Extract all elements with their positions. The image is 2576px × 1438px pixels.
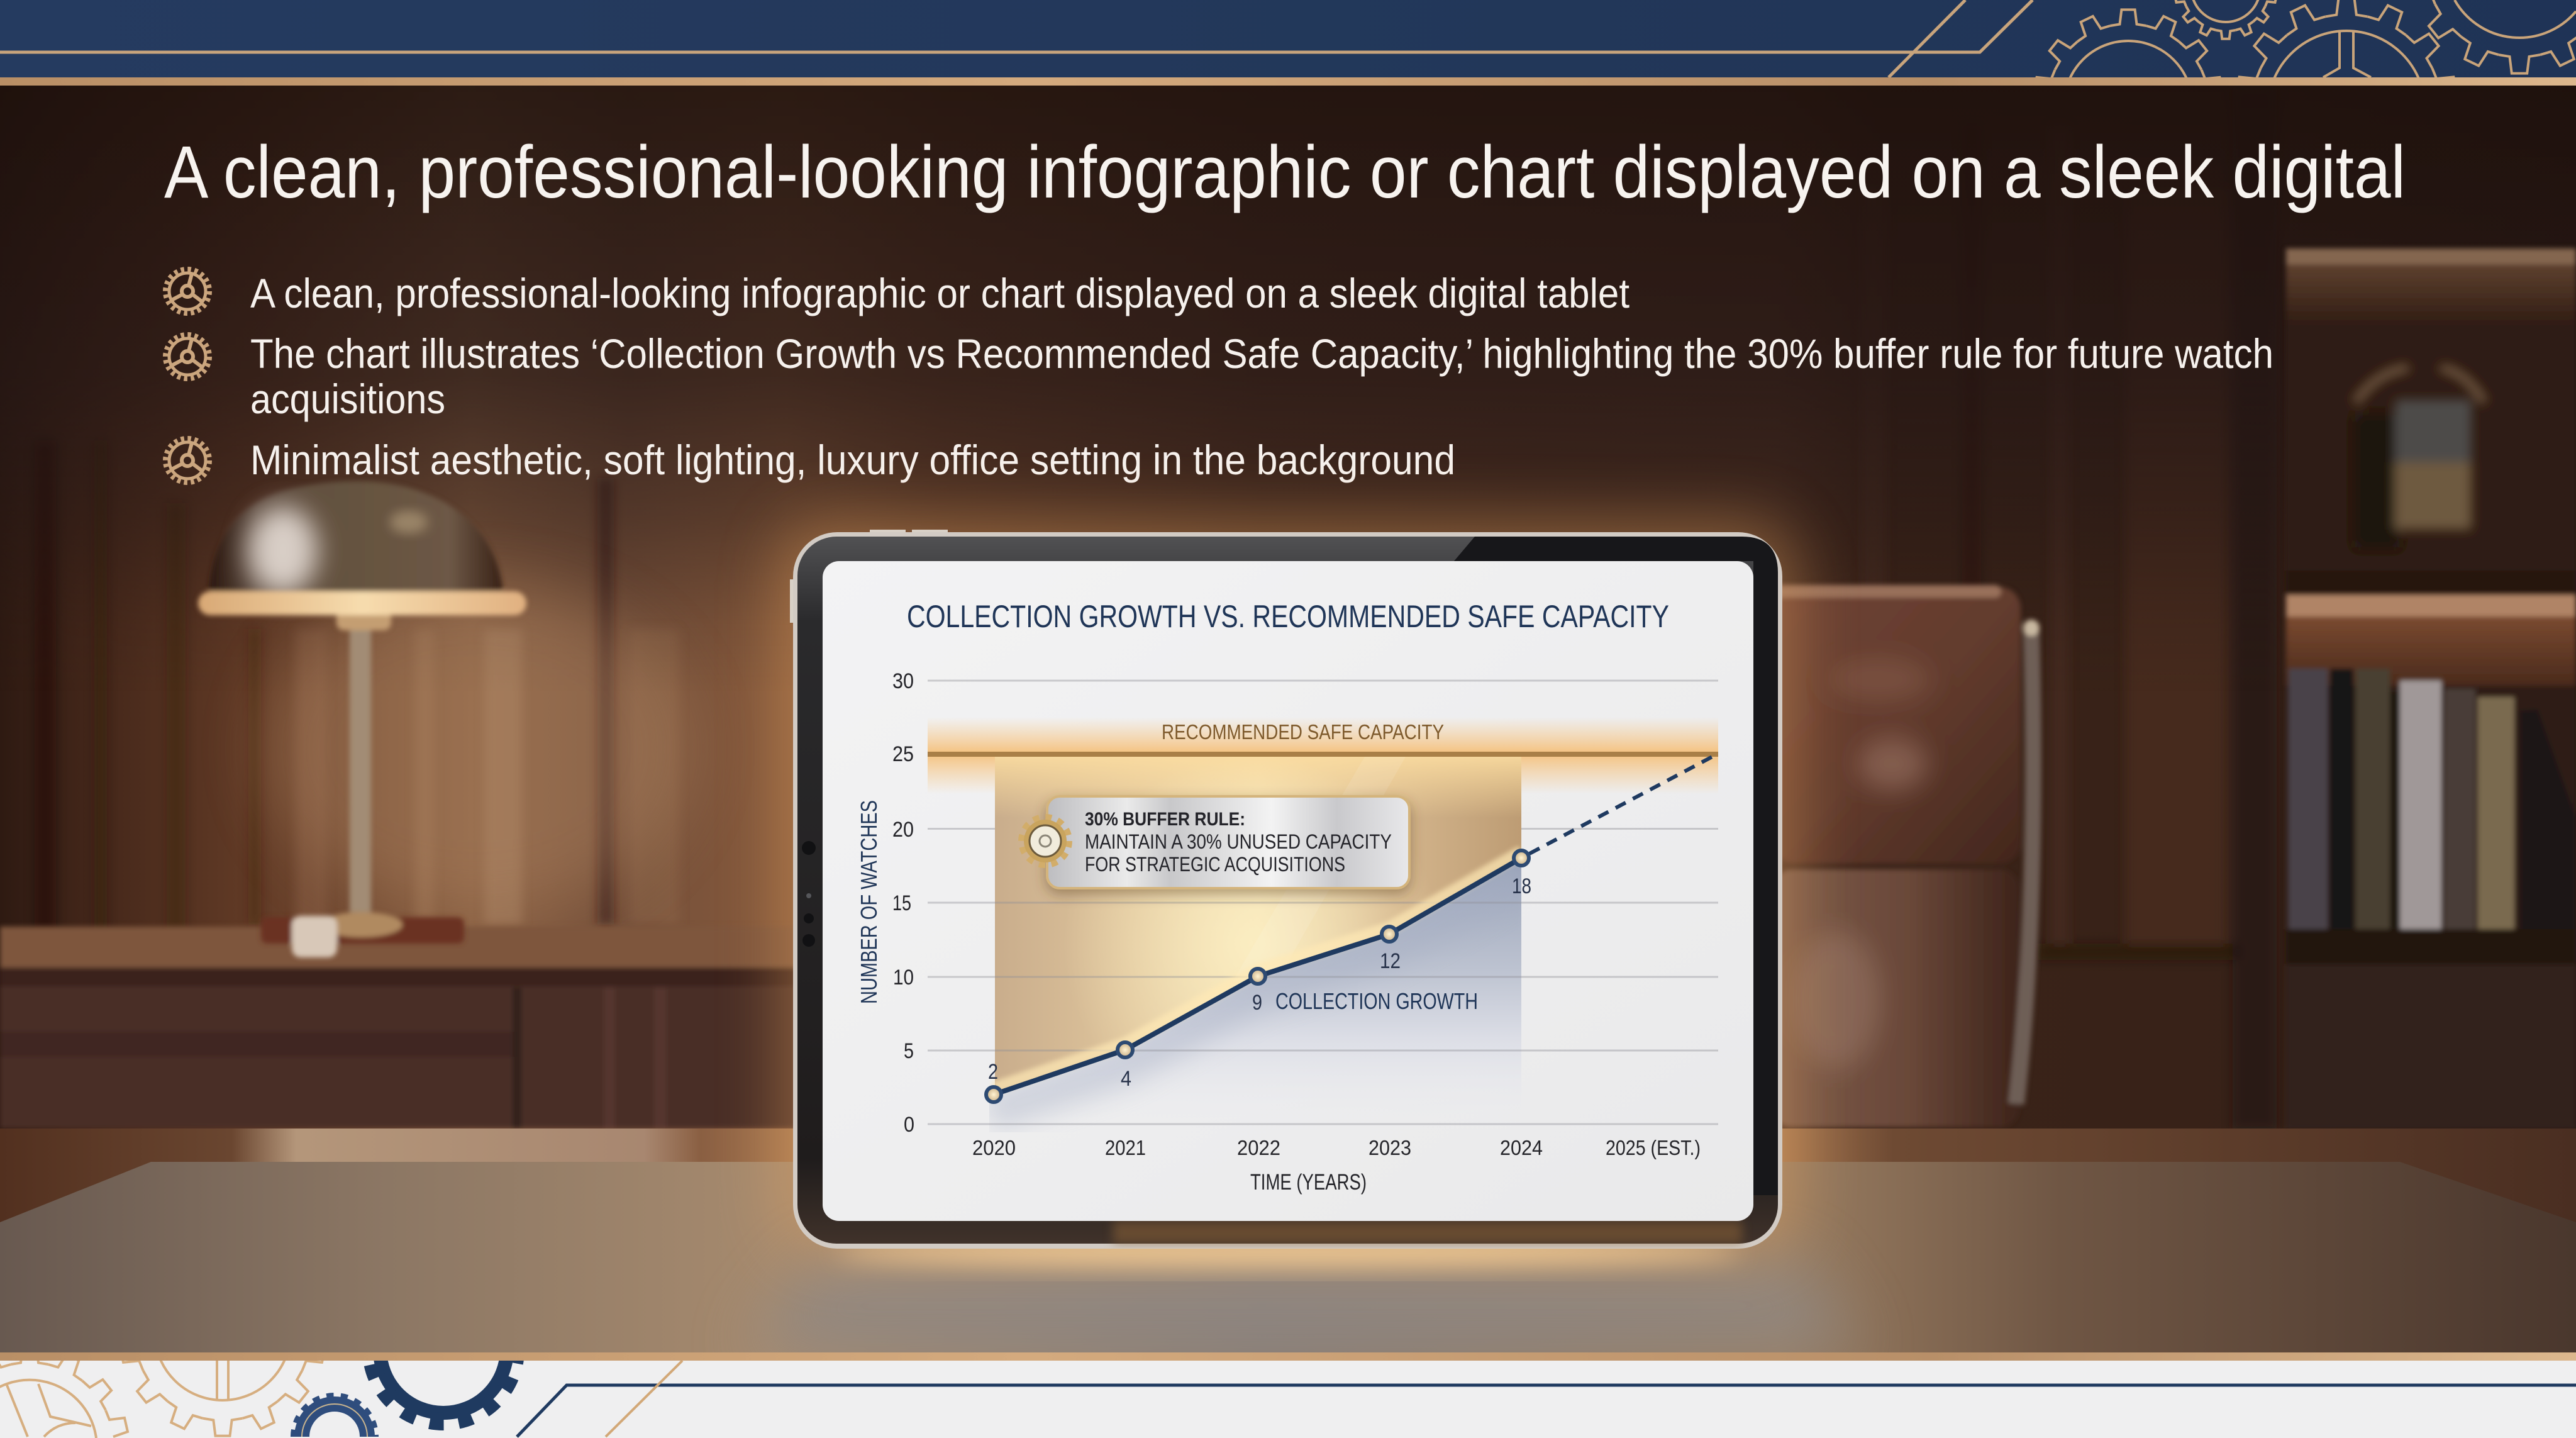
x axis years: 2022: [1237, 1136, 1280, 1159]
icon: gear bullet 1: [165, 269, 209, 313]
y axis numbers: 15: [892, 891, 911, 915]
x axis years: 2021: [1105, 1136, 1146, 1159]
side buttons: [790, 530, 948, 623]
data labels: 4: [1121, 1067, 1131, 1091]
gear outlines gold: [0, 1361, 324, 1438]
bottom band with gears: [0, 1229, 2576, 1438]
x axis years: 2023: [1368, 1136, 1411, 1159]
bottom bezel light: [1113, 1221, 1742, 1244]
callout body: FOR STRATEGIC ACQUISITIONS: [1085, 853, 1345, 876]
capacity line: [928, 752, 1718, 757]
bookshelf: [2286, 248, 2576, 1129]
chair: [1774, 585, 2040, 1127]
bullet text 2: The chart illustrates ‘Collection Growth vs Recommended Safe Capacity,’ highlighting the 30% buffer rule for future watch: [250, 330, 2273, 377]
y axis numbers: 20: [892, 818, 914, 842]
gold strip: [0, 77, 2576, 86]
wood wall: [0, 86, 2576, 1130]
y axis numbers: 10: [893, 966, 914, 989]
chart: [856, 599, 1718, 1195]
y axis numbers: 0: [904, 1113, 914, 1137]
tablet glow: [780, 519, 1796, 1268]
y axis numbers: 25: [892, 742, 914, 766]
capacity label: RECOMMENDED SAFE CAPACITY: [1162, 720, 1444, 744]
growth line: [994, 858, 1521, 1095]
y axis title: NUMBER OF WATCHES: [856, 800, 882, 1004]
capacity glow band: [928, 717, 1718, 794]
data labels: 2: [988, 1060, 998, 1084]
icon: desk lamp: [198, 481, 526, 957]
gold buffer area: [995, 757, 1521, 1095]
callout body: [1085, 830, 1392, 876]
data points: [986, 850, 1529, 1102]
y axis numbers: 30: [892, 669, 914, 693]
data labels: 18: [1512, 874, 1531, 898]
series label: COLLECTION GROWTH: [1275, 988, 1478, 1014]
console: [0, 927, 799, 1129]
tablet: [790, 530, 1782, 1249]
bullet text 2: [250, 330, 2273, 422]
gear outlines: [2035, 0, 2576, 77]
y axis numbers: [892, 669, 914, 1137]
wood grain stripes: [35, 86, 2277, 1130]
data labels: 12: [1380, 949, 1401, 973]
data labels: [988, 874, 1531, 1091]
x axis title: TIME (YEARS): [1250, 1170, 1367, 1195]
tablet frame: [793, 532, 1782, 1249]
navy band: [0, 0, 2576, 77]
gold strip: [0, 1352, 2576, 1361]
camera dots: [802, 841, 816, 947]
growth line glow: [994, 852, 1521, 1088]
grid lines: [928, 681, 1718, 1124]
callout plate: [1047, 796, 1409, 888]
y axis numbers: 5: [904, 1039, 914, 1063]
icon: gear bullet 3: [165, 438, 209, 482]
screen: [823, 561, 1753, 1221]
shadow on mat under tablet: [742, 1258, 1862, 1352]
data labels: 9: [1252, 991, 1262, 1015]
x axis years: 2025 (EST.): [1606, 1136, 1701, 1159]
blue growth area: [989, 858, 1521, 1132]
navy gears: [294, 1277, 516, 1437]
bullet list: [165, 269, 2273, 483]
callout heading: 30% BUFFER RULE:: [1085, 809, 1245, 830]
dashed projection: [1530, 754, 1718, 854]
callout: 30% buffer rule: [1023, 796, 1409, 888]
bezel: [797, 537, 1778, 1244]
icon: gold gear badge: [1023, 818, 1068, 864]
x axis years: [972, 1136, 1701, 1159]
bezel dark reflection: [1454, 537, 1778, 1195]
callout body: MAINTAIN A 30% UNUSED CAPACITY: [1085, 830, 1392, 853]
wall glow under lamp: [264, 585, 692, 912]
thin gold lines: [0, 0, 2033, 77]
white band: [0, 1361, 2576, 1438]
top band with gears: [0, 0, 2576, 221]
x axis years: 2020: [972, 1136, 1016, 1159]
chart title: COLLECTION GROWTH VS. RECOMMENDED SAFE CAPACITY: [907, 599, 1669, 634]
bullet text 3: Minimalist aesthetic, soft lighting, luxury office setting in the background: [250, 437, 1455, 483]
bullet text 2: acquisitions: [250, 376, 445, 422]
icon: gear bullet 2: [165, 335, 209, 379]
desk edge: [0, 1129, 2576, 1229]
bullet text 1: A clean, professional-looking infographic or chart displayed on a sleek digital tablet: [250, 270, 1629, 316]
x axis years: 2024: [1500, 1136, 1543, 1159]
decorative corner lines: [517, 1385, 2576, 1437]
desk mat: [0, 1162, 2576, 1352]
dark overlay behind text: [0, 86, 2576, 692]
